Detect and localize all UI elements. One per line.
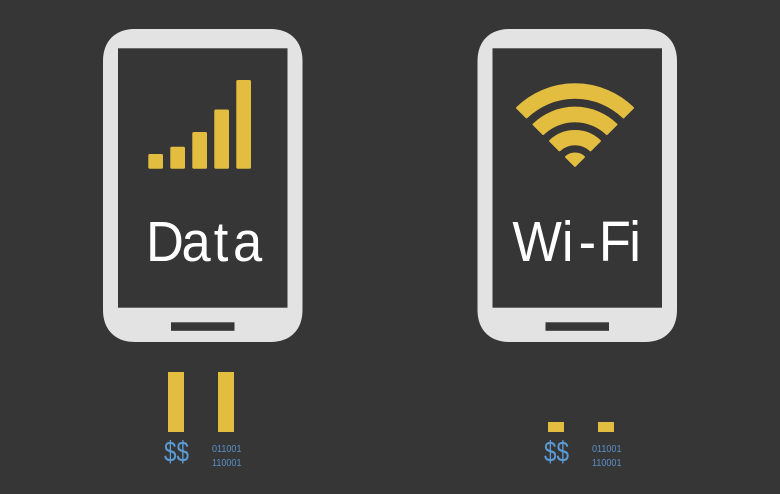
label: dollars: $$	[164, 437, 189, 469]
bar: data cost	[168, 372, 184, 432]
label: binary: 110001	[212, 458, 242, 469]
label: binary: 110001	[592, 458, 622, 469]
icon: cellular signal bars	[148, 80, 251, 169]
panel: data phone	[103, 29, 302, 342]
bar: wifi cost	[548, 422, 564, 432]
label: binary: 011001	[592, 444, 622, 455]
panel: data costs	[164, 372, 242, 469]
phone home button: data	[171, 322, 234, 331]
bar: wifi usage	[598, 422, 614, 432]
phone body: wifi	[478, 29, 677, 342]
icon: wifi signal	[517, 84, 633, 166]
phone body: data	[103, 29, 302, 342]
label: binary: 011001	[212, 444, 242, 455]
phone screen: data	[118, 48, 288, 308]
panel: wifi costs	[544, 422, 622, 469]
phone home button: wifi	[546, 322, 609, 331]
phone screen: wifi	[492, 48, 662, 308]
heading: Data: Data	[146, 209, 263, 273]
label: dollars: $$	[544, 437, 569, 469]
label: binary	[592, 444, 622, 469]
panel: wifi phone	[478, 29, 677, 342]
bar: data usage	[218, 372, 234, 432]
label: binary	[212, 444, 242, 469]
heading: Wi-Fi: Wi-Fi	[512, 209, 641, 273]
